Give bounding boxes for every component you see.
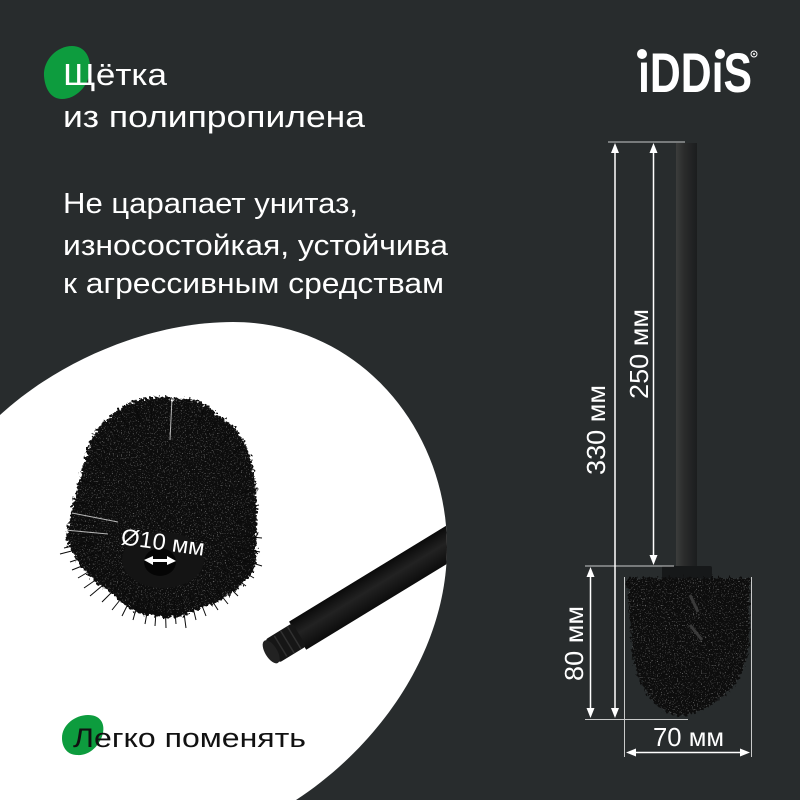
replacement brush head photo xyxy=(60,396,262,628)
bristle gaps xyxy=(65,398,172,534)
handle thread xyxy=(266,624,304,662)
250 mm arrow xyxy=(650,143,658,565)
assembled brush product xyxy=(627,143,750,716)
handle rod xyxy=(289,525,464,650)
heading text: из полипропилена xyxy=(63,99,366,134)
collar xyxy=(662,566,712,579)
80 mm label: 80 мм xyxy=(559,606,589,681)
bristle mass xyxy=(66,397,257,618)
bristle texture xyxy=(627,578,750,716)
dimension lines xyxy=(585,142,752,757)
hub hole xyxy=(144,548,176,576)
description text: Не царапает унитаз, xyxy=(63,188,358,220)
80 mm arrow xyxy=(586,567,594,718)
heading text: Щётка xyxy=(63,57,168,92)
stick xyxy=(676,143,697,567)
bristle head xyxy=(627,578,750,716)
green accent blob: label xyxy=(62,715,103,755)
stray bristles xyxy=(60,396,262,628)
brush hub xyxy=(122,532,204,588)
heading xyxy=(44,46,366,134)
handle photo xyxy=(262,526,447,664)
heading text xyxy=(63,57,366,134)
70 mm label: 70 мм xyxy=(653,722,724,752)
green accent blob: heading xyxy=(44,46,90,99)
diameter arrow xyxy=(144,556,176,565)
330 mm label: 330 мм xyxy=(581,385,611,475)
bristle highlights xyxy=(690,595,702,640)
description text: износостойкая, устойчива xyxy=(63,230,449,262)
dimension labels xyxy=(559,309,724,752)
250 mm label: 250 мм xyxy=(624,309,654,399)
70 mm arrow xyxy=(626,748,750,756)
label: easy replacement xyxy=(62,715,306,755)
description text: к агрессивным средствам xyxy=(63,268,444,300)
handle tip xyxy=(262,640,280,664)
extension lines xyxy=(585,142,752,757)
bristle texture xyxy=(66,398,257,613)
logo: IDDIS: ıDDıS xyxy=(638,41,752,104)
white round panel xyxy=(0,322,447,800)
330 mm arrow xyxy=(611,143,619,718)
description text xyxy=(63,188,449,300)
label text: Легко поменять xyxy=(73,723,306,753)
diameter label: Ø10 мм xyxy=(120,523,206,561)
